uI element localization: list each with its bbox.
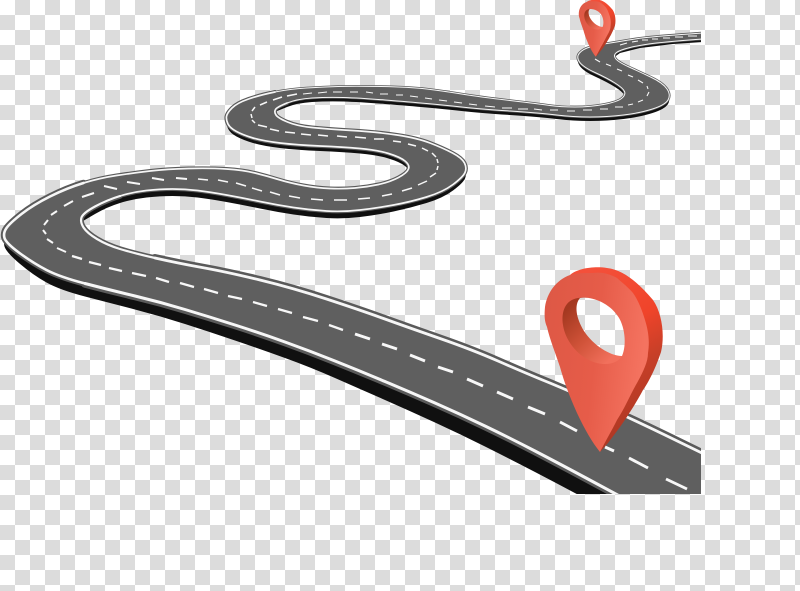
far pin side wall xyxy=(587,0,615,57)
far pin hole rim xyxy=(584,9,603,30)
near pin side wall xyxy=(570,267,663,452)
icon: far location pin xyxy=(579,0,615,57)
near pin hole opening xyxy=(577,298,625,356)
far pin hole opening xyxy=(589,9,603,27)
near pin hole rim (inner wall) xyxy=(563,298,625,364)
road centre dashes xyxy=(43,36,697,489)
road side wall (black thickness) xyxy=(4,36,720,520)
road edge lines (white) xyxy=(4,33,711,507)
near pin front face xyxy=(545,273,649,452)
icon: near location pin xyxy=(545,267,663,452)
road surface xyxy=(4,33,720,520)
road verge (grey shoulder outside the white lines) xyxy=(4,33,711,507)
winding road xyxy=(4,33,720,520)
far pin front face xyxy=(579,1,611,57)
